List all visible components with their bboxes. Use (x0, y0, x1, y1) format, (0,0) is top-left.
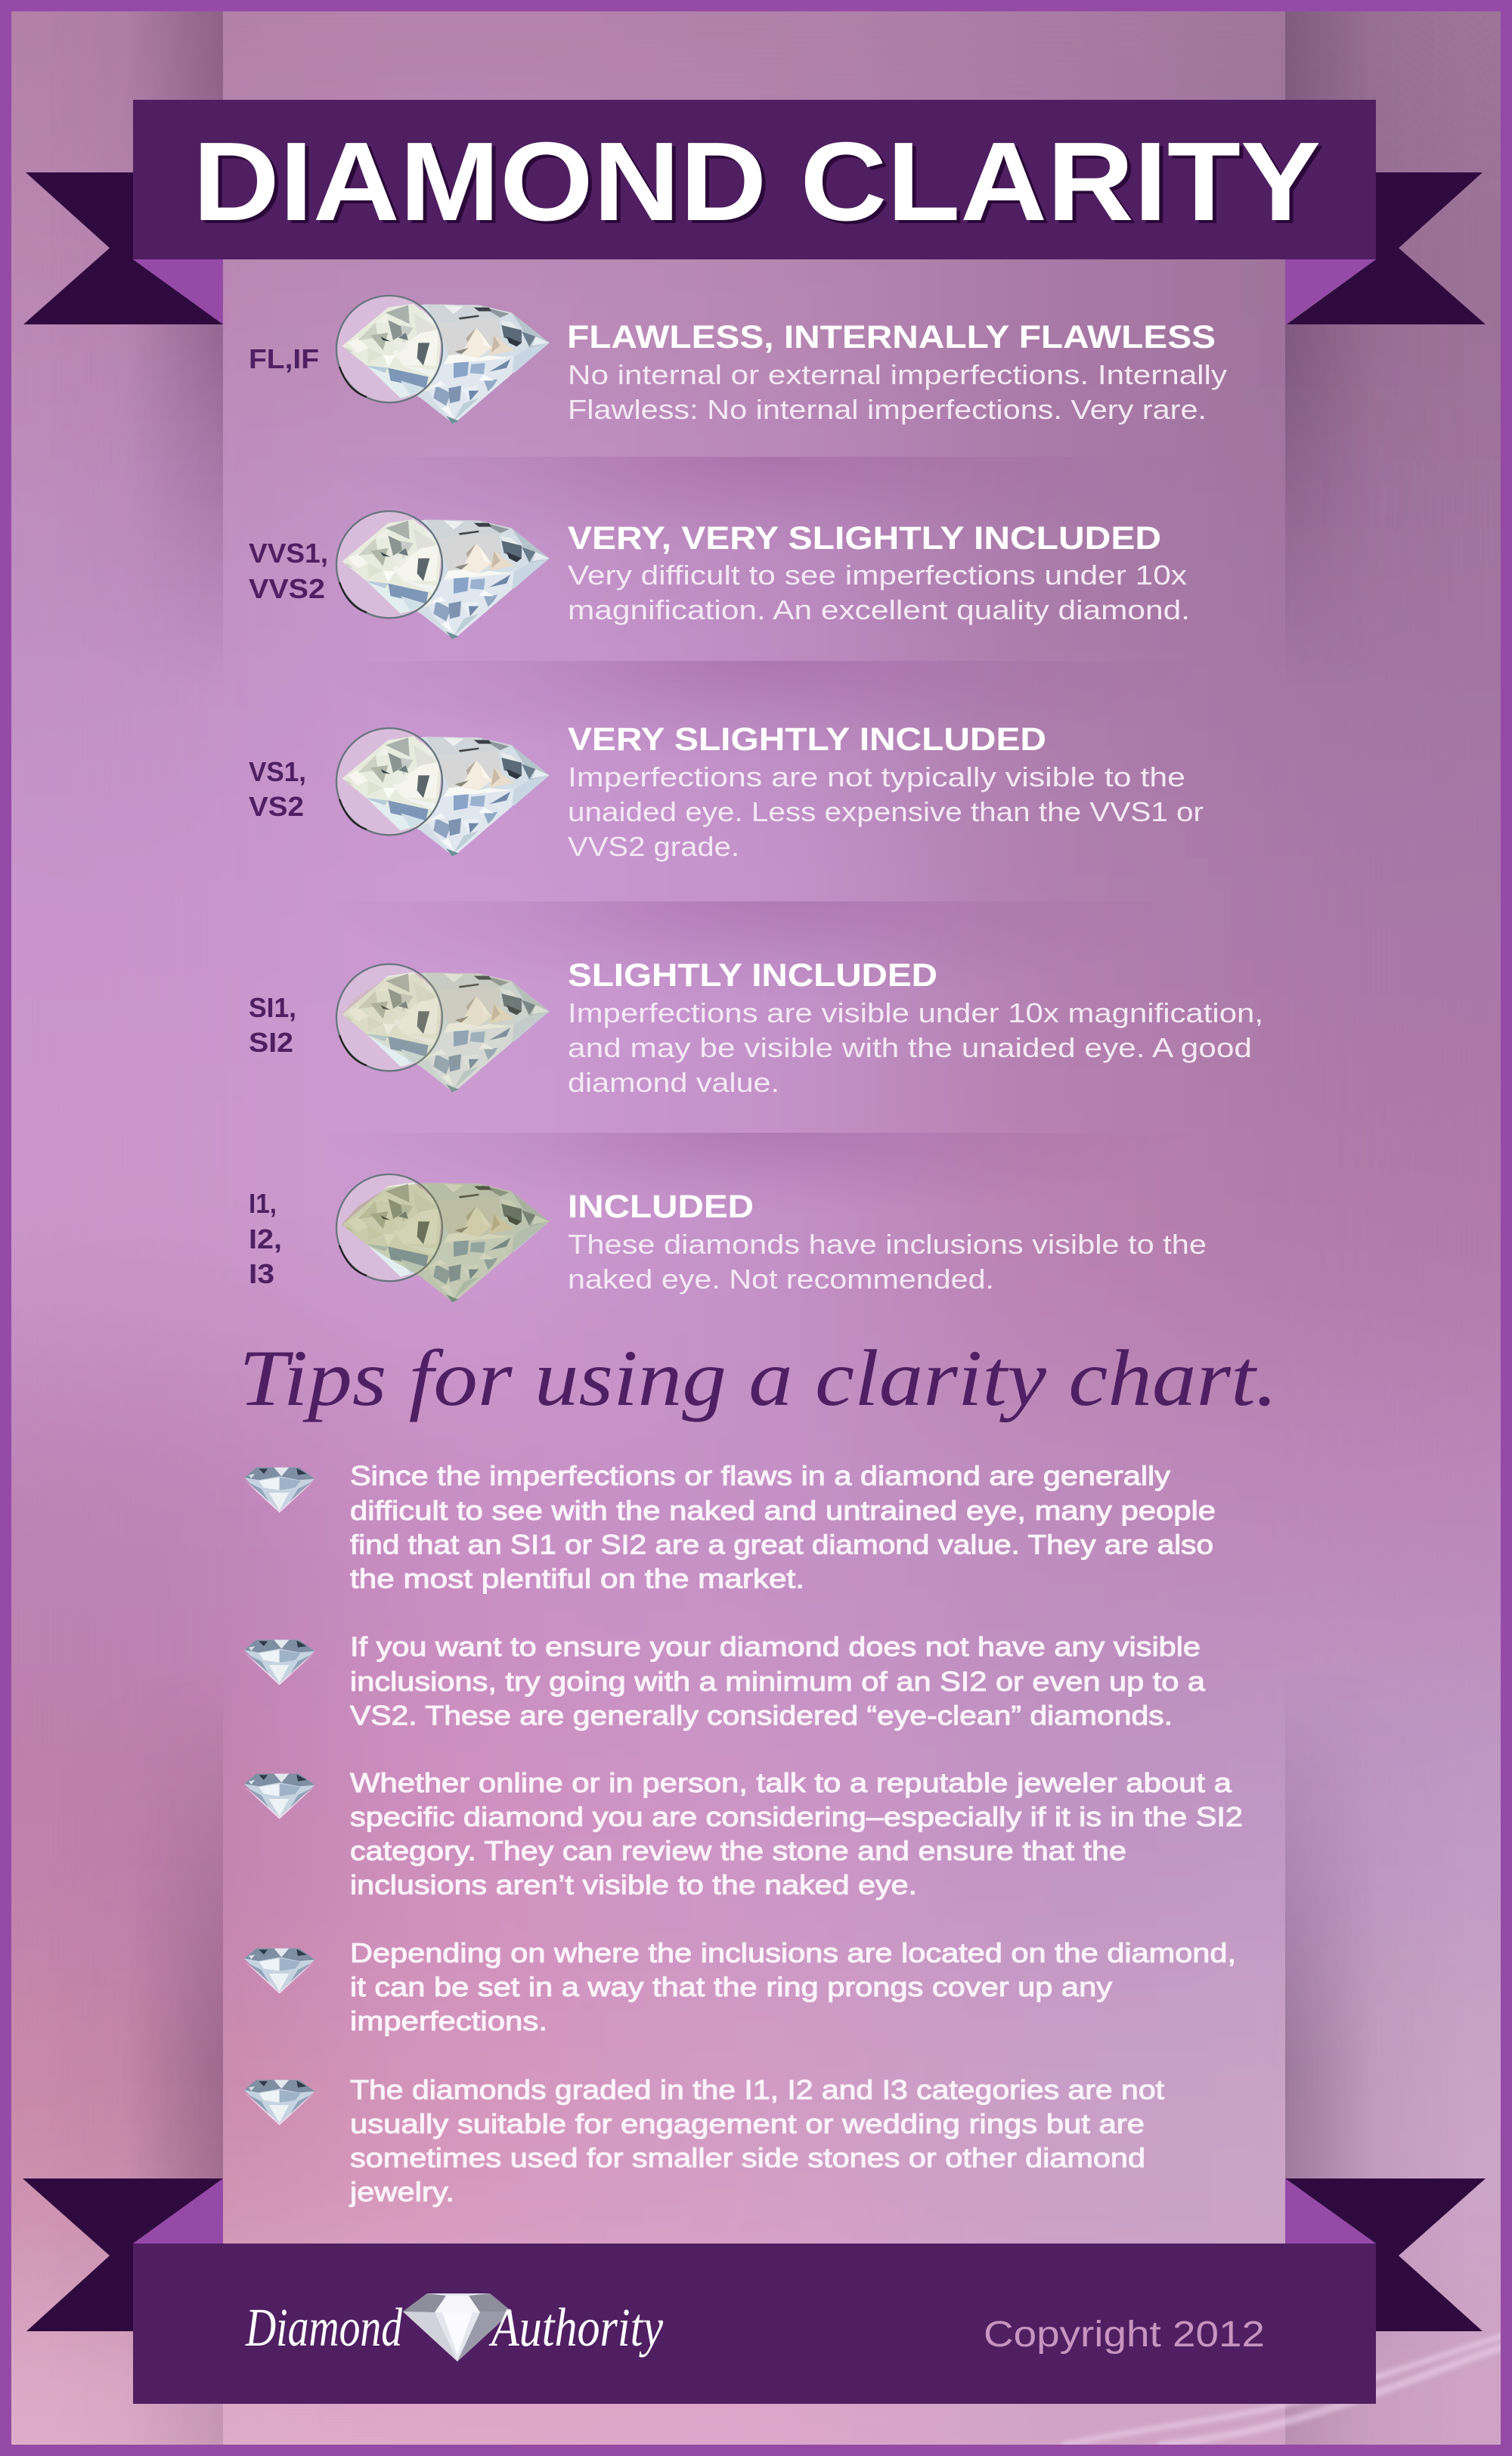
copyright: Copyright 2012 (984, 2315, 1265, 2355)
row description (568, 359, 1227, 425)
row description: VVS2 grade. (568, 831, 739, 862)
grade label (249, 992, 296, 1058)
grade label (249, 538, 328, 604)
tip text: VS2. These are generally considered “eye-clean” diamonds. (350, 1700, 1173, 1731)
top ribbon (23, 100, 1486, 324)
row description: diamond value. (568, 1067, 779, 1098)
row: VS1, VS2 (249, 721, 1204, 862)
row: VVS1, VVS2 (249, 511, 1190, 640)
grade label (249, 756, 306, 822)
tip text: usually suitable for engagement or wedding rings but are (350, 2108, 1145, 2139)
tip text: it can be set in a way that the ring prongs cover up any (350, 1971, 1112, 2002)
grade label: VS2 (249, 791, 304, 822)
icon: small diamond (244, 1640, 314, 1685)
grade label: I2, (249, 1223, 282, 1254)
row heading: VERY, VERY SLIGHTLY INCLUDED (568, 520, 1161, 557)
row heading: SLIGHTLY INCLUDED (568, 957, 937, 994)
tip text: If you want to ensure your diamond does not have any visible (350, 1631, 1201, 1662)
icon: diamond under magnifier (336, 296, 550, 424)
tip text: imperfections. (350, 2005, 547, 2036)
row: SI1, SI2 (249, 957, 1263, 1098)
grade label: VVS1, (249, 538, 328, 569)
row description: Flawless: No internal imperfections. Very rare. (568, 394, 1207, 425)
grade label: SI2 (249, 1027, 293, 1058)
row description: No internal or external imperfections. Internally (568, 359, 1227, 390)
tip text: sometimes used for smaller side stones or other diamond (350, 2142, 1145, 2173)
row description: and may be visible with the unaided eye. A good (568, 1032, 1252, 1063)
row description (568, 1229, 1207, 1295)
grade label: VVS2 (249, 573, 325, 604)
grade label: I1, (249, 1188, 277, 1219)
tip 5 (244, 2074, 1164, 2207)
row description: Imperfections are visible under 10x magnification, (568, 997, 1263, 1028)
icon: diamond under magnifier (336, 728, 550, 857)
bottom ribbon (23, 2178, 1486, 2404)
row description: magnification. An excellent quality diamond. (568, 594, 1190, 625)
tip text: find that an SI1 or SI2 are a great diamond value. They are also (350, 1529, 1213, 1560)
row heading: FLAWLESS, INTERNALLY FLAWLESS (567, 319, 1216, 355)
row heading: INCLUDED (568, 1189, 754, 1225)
section divider shadows (318, 457, 1210, 1216)
title: DIAMOND CLARITY (197, 122, 1325, 247)
row description: naked eye. Not recommended. (568, 1264, 994, 1295)
title: DIAMOND CLARITY (193, 119, 1321, 244)
tip 1 (244, 1460, 1216, 1594)
row description (568, 997, 1263, 1098)
icon: small diamond (244, 2080, 314, 2126)
tip text: Whether online or in person, talk to a reputable jeweler about a (350, 1767, 1232, 1798)
logo wordmark right: Authority (489, 2297, 663, 2358)
tip 3 (244, 1767, 1243, 1900)
row heading: VERY SLIGHTLY INCLUDED (568, 721, 1046, 758)
tip text (350, 1767, 1243, 1900)
icon: diamond under magnifier (336, 511, 550, 640)
grade label (249, 1188, 282, 1289)
tip text: category. They can review the stone and ensure that the (350, 1835, 1126, 1866)
row description: unaided eye. Less expensive than the VVS1 or (568, 796, 1204, 827)
tips heading: Tips for using a clarity chart. (239, 1334, 1278, 1422)
row description: Imperfections are not typically visible to the (568, 761, 1185, 792)
grade label: I3 (249, 1258, 274, 1289)
logo wordmark left: Diamond (245, 2297, 403, 2358)
tip text: jewelry. (349, 2176, 454, 2207)
tip text (349, 2074, 1164, 2207)
tip text: inclusions, try going with a minimum of an SI2 or even up to a (350, 1666, 1206, 1697)
grade label: SI1, (249, 992, 296, 1023)
logo: Diamond Authority (245, 2293, 663, 2361)
row description: These diamonds have inclusions visible to the (568, 1229, 1207, 1260)
row description: Very difficult to see imperfections under 10x (568, 560, 1187, 591)
grade label: VS1, (249, 756, 306, 787)
tip text (350, 1631, 1206, 1731)
decorative silk swoosh (1064, 2337, 1501, 2445)
tip text: The diamonds graded in the I1, I2 and I3 categories are not (350, 2074, 1164, 2105)
tip 4 (244, 1937, 1236, 2036)
tip text: the most plentiful on the market. (350, 1563, 804, 1594)
tip text: difficult to see with the naked and untrained eye, many people (350, 1495, 1216, 1526)
tip text (350, 1460, 1216, 1594)
tip text: Depending on where the inclusions are located on the diamond, (350, 1937, 1236, 1968)
icon: logo diamond (403, 2293, 512, 2361)
icon: small diamond (244, 1949, 314, 1994)
row description (568, 761, 1204, 862)
icon: yellow-tinted diamond under magnifier (336, 1174, 550, 1303)
row: I1, I2, I3 (249, 1174, 1207, 1303)
icon: small diamond (244, 1774, 314, 1819)
icon: tinted diamond under magnifier (336, 964, 550, 1093)
tip text: Since the imperfections or flaws in a diamond are generally (350, 1460, 1170, 1491)
tip text (350, 1937, 1236, 2036)
row description (568, 560, 1190, 625)
icon: small diamond (244, 1468, 314, 1513)
row: FL, IF (249, 296, 1227, 425)
tip text: inclusions aren’t visible to the naked eye. (350, 1869, 917, 1900)
grade label: FL,IF (249, 343, 319, 374)
tip 2 (244, 1631, 1206, 1731)
tip text: specific diamond you are considering–especially if it is in the SI2 (350, 1801, 1243, 1832)
